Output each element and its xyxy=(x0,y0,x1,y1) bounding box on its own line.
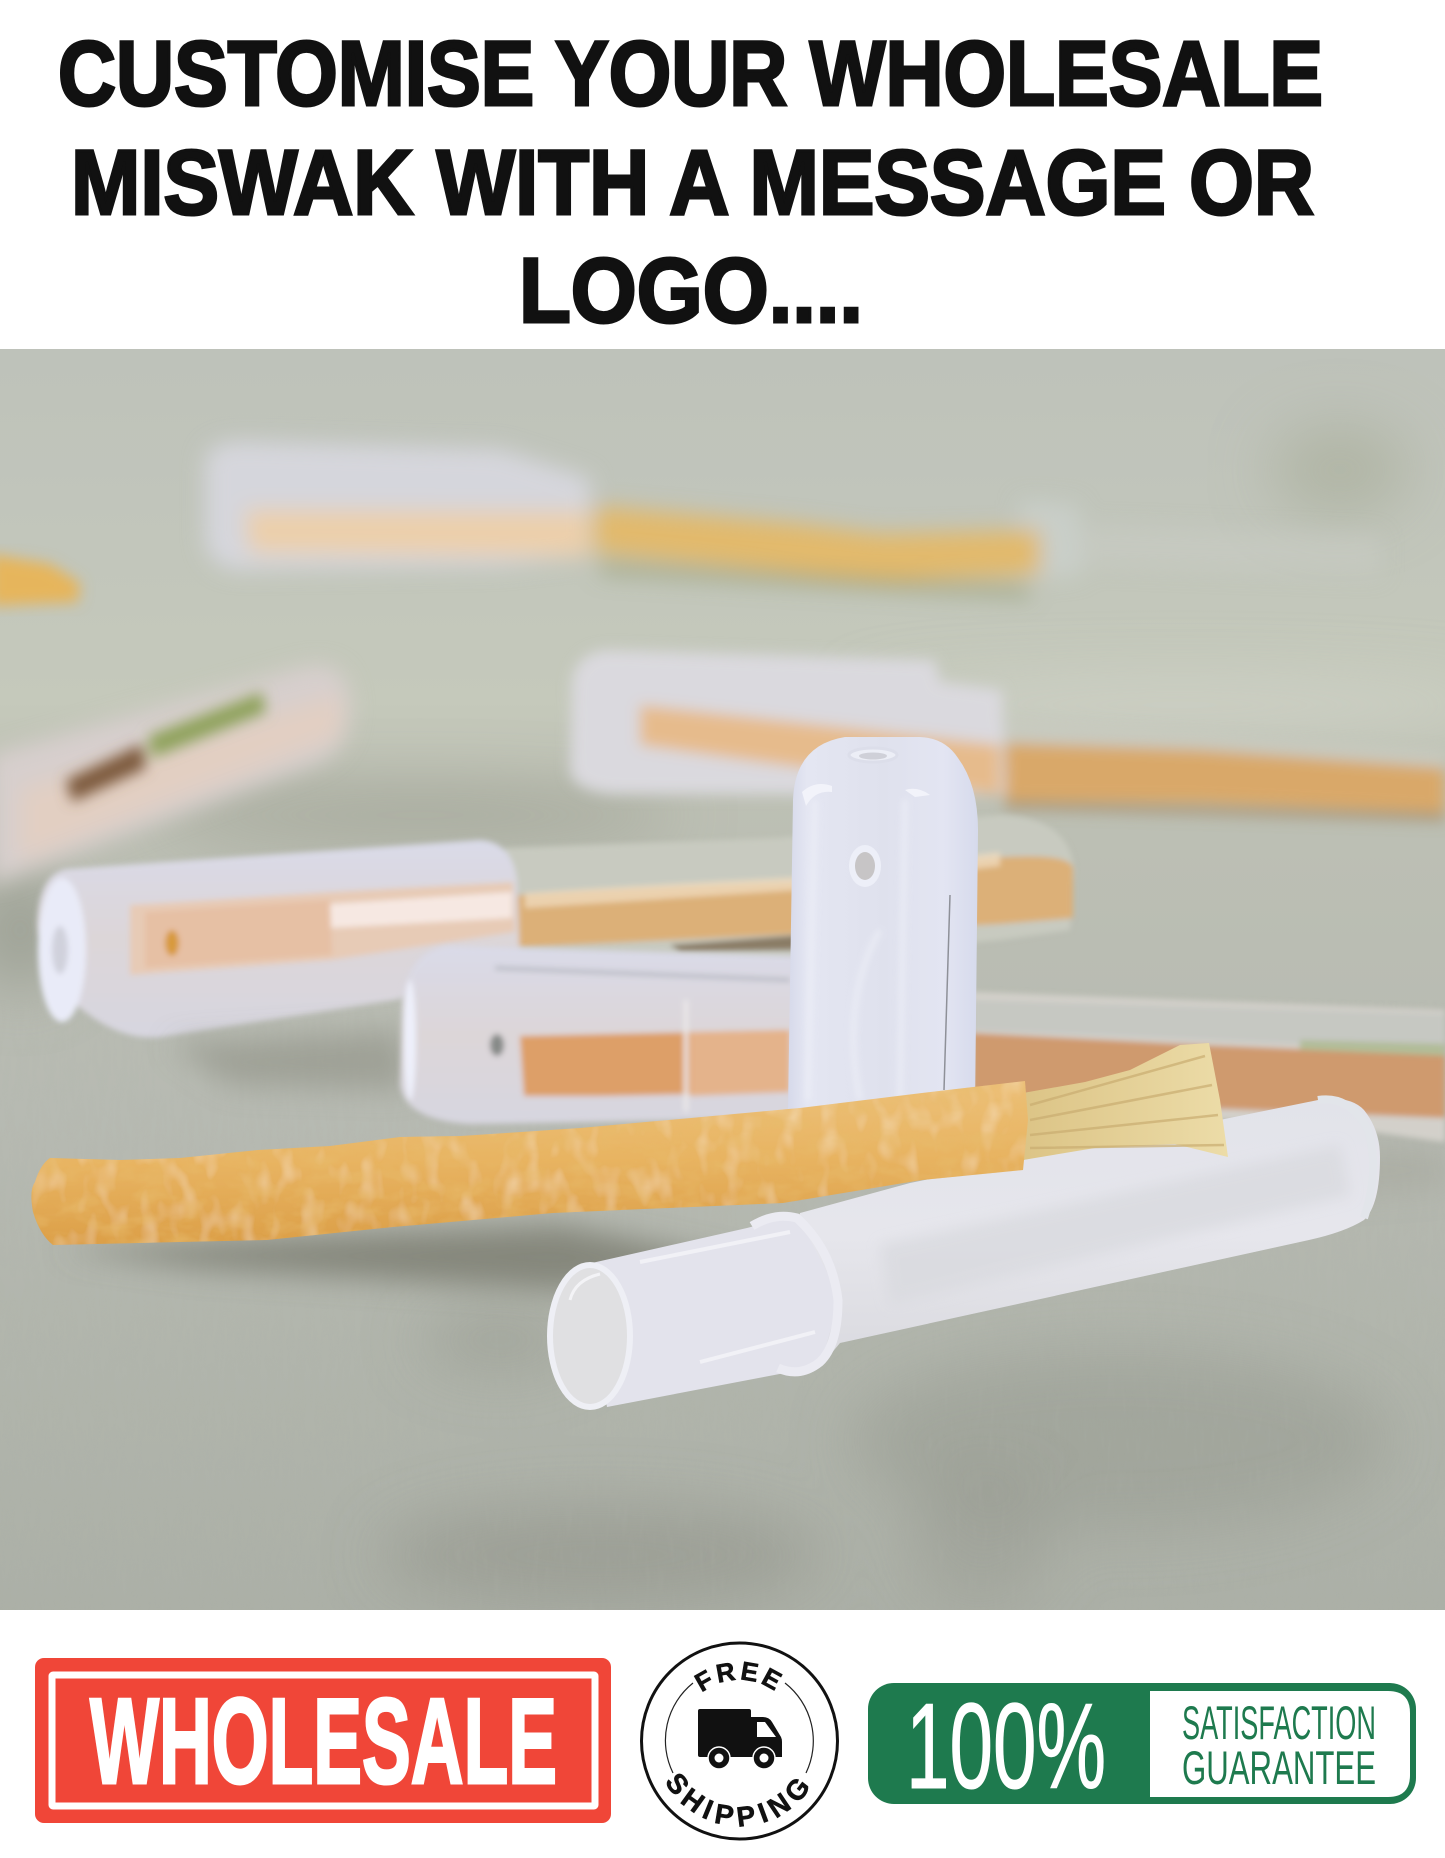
title xyxy=(58,23,1323,342)
left foreground case xyxy=(37,815,1074,1037)
product photo: miswak sticks in clear cases xyxy=(0,349,1445,1610)
wood xyxy=(31,1081,1028,1245)
miswak stick xyxy=(31,1043,1228,1245)
blurred far case and stick xyxy=(198,434,1085,607)
blurred left case with logo xyxy=(0,665,350,885)
surface texture xyxy=(0,1000,1445,1610)
badge: wholesale xyxy=(35,1658,611,1823)
badge: free shipping xyxy=(640,1642,839,1840)
label: shipping: SHIPPING xyxy=(666,1774,808,1827)
middle case with orange stick xyxy=(400,946,1445,1142)
bristles xyxy=(1023,1043,1228,1160)
blurred stick far left xyxy=(0,554,80,606)
blurred mid case and stick xyxy=(570,650,1445,822)
clear tube xyxy=(550,1099,1380,1407)
title: MISWAK WITH A MESSAGE OR xyxy=(71,132,1314,234)
badge: 100% satisfaction guarantee: 100% xyxy=(906,1678,1106,1814)
badge: wholesale: WHOLESALE xyxy=(90,1673,557,1809)
icon: delivery truck xyxy=(698,1709,782,1769)
badge: 100% satisfaction guarantee xyxy=(868,1678,1416,1814)
shadow under cases xyxy=(60,1030,1445,1290)
title: LOGO.... xyxy=(519,240,863,342)
upright clear cap xyxy=(788,737,978,1110)
label: free: FREE xyxy=(694,1661,783,1692)
